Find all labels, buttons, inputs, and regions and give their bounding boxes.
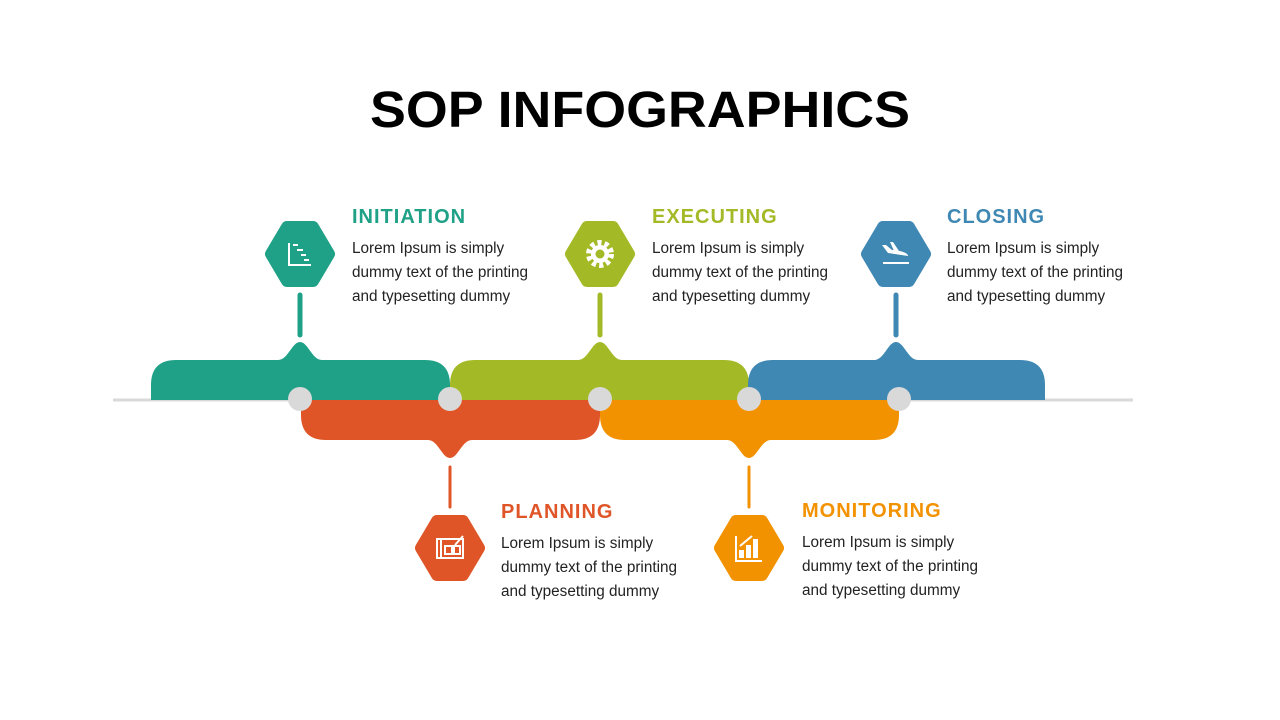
text: planning — [501, 501, 677, 600]
text: executing: Lorem Ipsum is simply — [652, 240, 805, 257]
text: executing: EXECUTING — [652, 206, 778, 228]
icon: monitoring bars — [720, 521, 778, 575]
text: closing: CLOSING — [947, 206, 1045, 228]
text: monitoring: Lorem Ipsum is simply — [802, 534, 955, 551]
text: closing — [947, 206, 1123, 305]
text: executing — [652, 206, 828, 305]
icon: executing gear — [571, 227, 629, 281]
timeline dots — [288, 387, 911, 411]
icon: planning blueprint — [421, 521, 479, 575]
bar: initiation — [151, 342, 450, 400]
title: SOP INFOGRAPHICS — [370, 81, 910, 138]
icon: initiation chart — [271, 227, 329, 281]
connectors — [300, 295, 896, 507]
text: planning: and typesetting dummy — [501, 583, 660, 600]
text: monitoring: dummy text of the printing — [802, 558, 978, 575]
text: initiation: INITIATION — [352, 206, 466, 228]
text: initiation: dummy text of the printing — [352, 264, 528, 281]
text: planning: dummy text of the printing — [501, 559, 677, 576]
icon: closing plane — [867, 227, 925, 281]
text: initiation: Lorem Ipsum is simply — [352, 240, 505, 257]
text: planning: PLANNING — [501, 501, 613, 523]
text: initiation: and typesetting dummy — [352, 288, 511, 305]
text: closing: dummy text of the printing — [947, 264, 1123, 281]
text: closing: Lorem Ipsum is simply — [947, 240, 1100, 257]
bar: closing — [748, 342, 1045, 400]
text: executing: dummy text of the printing — [652, 264, 828, 281]
bar: monitoring — [600, 400, 899, 458]
text: planning: Lorem Ipsum is simply — [501, 535, 654, 552]
bar: planning — [301, 400, 600, 458]
text: monitoring: and typesetting dummy — [802, 582, 961, 599]
text: closing: and typesetting dummy — [947, 288, 1106, 305]
text: executing: and typesetting dummy — [652, 288, 811, 305]
bar: executing — [450, 342, 749, 400]
text: monitoring — [802, 500, 978, 599]
text: monitoring: MONITORING — [802, 500, 942, 522]
text: initiation — [352, 206, 528, 305]
